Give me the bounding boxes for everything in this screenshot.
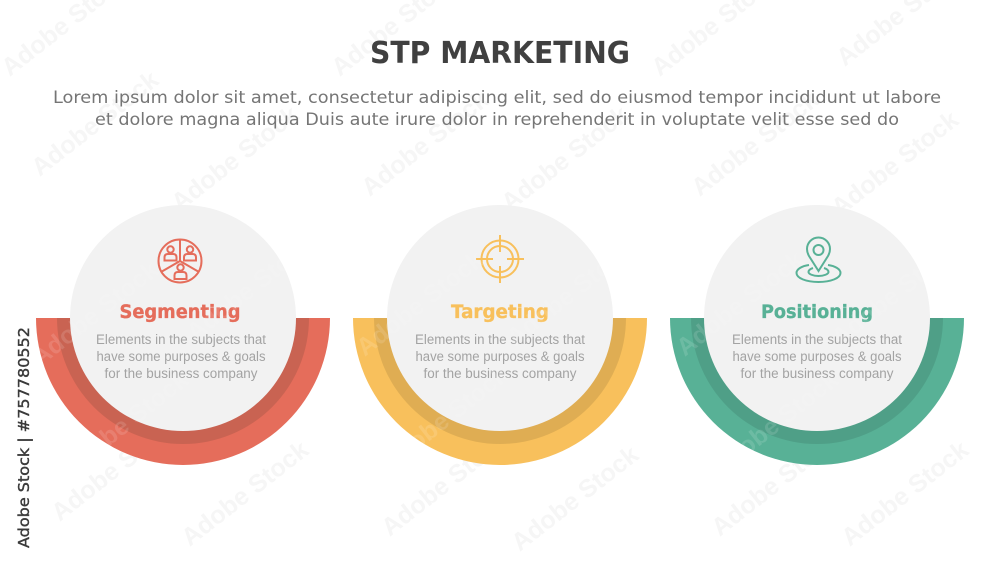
watermark under layer: Adobe Stock	[506, 441, 644, 557]
description: segmenting	[96, 332, 266, 381]
watermark over layer: Adobe Stock	[671, 246, 809, 362]
inner dark half ring	[57, 318, 309, 444]
watermark under layer: Adobe Stock	[166, 101, 304, 217]
description: targeting: for the business company	[424, 366, 577, 381]
watermark under layer: Adobe Stock	[706, 426, 844, 542]
watermark under layer: Adobe Stock	[686, 86, 824, 202]
stock id vertical label: Adobe Stock | #757780552	[15, 327, 33, 548]
outer half ring	[353, 318, 647, 465]
watermark over layer: Adobe Stock	[351, 246, 489, 362]
watermark under layer: Adobe Stock	[176, 436, 314, 552]
description: positioning: for the business company	[740, 366, 894, 381]
description: targeting: have some purposes & goals	[416, 349, 585, 364]
watermark over layer	[26, 231, 964, 482]
icon: map location pin	[796, 238, 840, 282]
description: targeting: Elements in the subjects that	[415, 332, 585, 347]
description: positioning: have some purposes & goals	[732, 349, 902, 364]
panel: targeting	[353, 205, 647, 465]
outer half ring	[670, 318, 964, 465]
description: segmenting: for the business company	[104, 366, 258, 381]
subtitle text	[53, 88, 941, 130]
inner dark half ring	[374, 318, 626, 444]
description: targeting	[415, 332, 585, 381]
watermark under layer: Adobe Stock	[836, 436, 974, 552]
subtitle text: Lorem ipsum dolor sit amet, consectetur adipiscing elit, sed do eiusmod tempor incididunt ut labore	[53, 88, 941, 108]
watermark over layer: Adobe Stock	[56, 366, 194, 482]
inner dark half ring	[691, 318, 943, 444]
panel: segmenting	[36, 205, 330, 465]
watermark over layer: Adobe Stock	[501, 236, 639, 352]
watermark under layer: Adobe Stock	[26, 66, 164, 182]
watermark over layer: Adobe Stock	[181, 231, 319, 347]
description: positioning: Elements in the subjects that	[732, 332, 902, 347]
icon: crosshair target	[476, 235, 524, 283]
watermark under layer: Adobe Stock	[356, 86, 494, 202]
watermark under layer: Adobe Stock	[376, 426, 514, 542]
watermark over layer: Adobe Stock	[26, 256, 164, 372]
heading: positioning: Positioning	[761, 301, 873, 323]
grey circle	[70, 205, 296, 431]
watermark over layer: Adobe Stock	[826, 236, 964, 352]
outer half ring	[36, 318, 330, 465]
subtitle text: et dolore magna aliqua Duis aute irure dolor in reprehenderit in voluptate velit esse sed do	[95, 110, 899, 130]
heading: segmenting: Segmenting	[120, 301, 240, 323]
title: STP MARKETING	[370, 36, 630, 71]
watermark under layer: Adobe Stock	[496, 101, 634, 217]
heading: targeting: Targeting	[451, 301, 549, 323]
watermark over layer: Adobe Stock	[376, 361, 514, 477]
watermark under layer: Adobe Stock	[826, 106, 964, 222]
description: segmenting: have some purposes & goals	[96, 349, 266, 364]
icon: segmented people	[158, 240, 202, 282]
description: segmenting: Elements in the subjects that	[96, 332, 266, 347]
grey circle	[704, 205, 930, 431]
watermark over layer: Adobe Stock	[706, 366, 844, 482]
description: positioning	[732, 332, 902, 381]
grey circle	[387, 205, 613, 431]
panel: positioning	[670, 205, 964, 465]
watermark under layer: Adobe Stock	[46, 411, 184, 527]
